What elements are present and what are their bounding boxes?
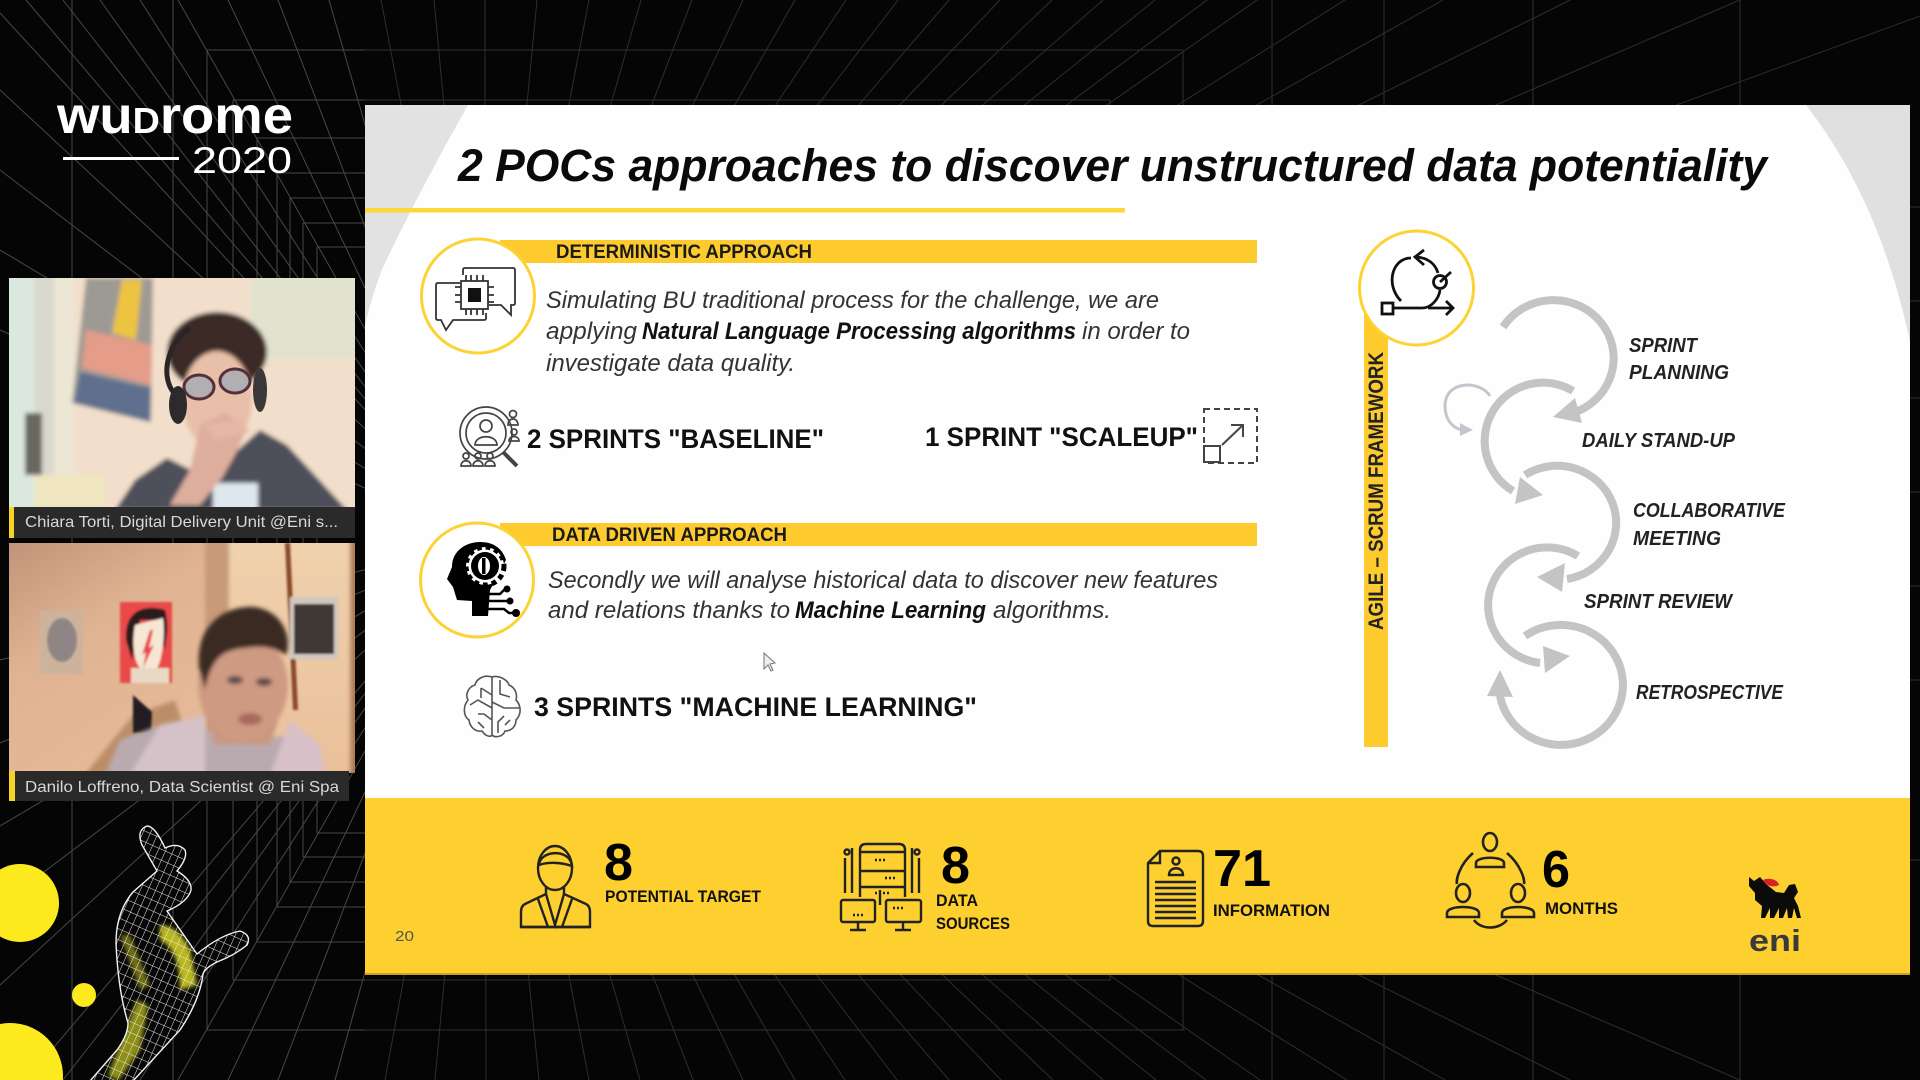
stat: 8 potential target <box>604 834 762 906</box>
stat: 8 data sources <box>936 837 1010 933</box>
video scene: woman with headphones <box>9 278 355 507</box>
vertical bar <box>1364 300 1388 747</box>
header bar <box>500 240 1257 263</box>
stat: 8 potential target: 8 <box>604 834 633 892</box>
stat: 8 potential target: POTENTIAL TARGET <box>605 887 762 906</box>
labels: scrum stages: DAILY STAND-UP <box>1582 430 1736 452</box>
slide background <box>365 105 1910 975</box>
stat: 6 months: MONTHS <box>1545 899 1618 918</box>
icon: brain <box>464 676 520 737</box>
logo: eni: eni <box>1749 923 1801 958</box>
stat: 71 information: 71 <box>1213 840 1271 898</box>
labels: scrum stages: PLANNING <box>1629 362 1729 384</box>
labels: scrum stages: SPRINT <box>1629 335 1699 357</box>
stat: 3 sprints machine learning: 3 SPRINTS "MACHINE LEARNING" <box>534 692 977 722</box>
icon: chat chip <box>422 239 534 353</box>
panel: key figures band <box>395 833 1801 958</box>
icon: team cycle <box>1447 833 1534 928</box>
caption: Danilo Loffreno: Danilo Loffreno, Data Scientist @ Eni Spa <box>25 779 339 796</box>
body text: investigate data quality. <box>546 350 795 377</box>
icon: agile loop <box>1360 231 1474 345</box>
body text: Secondly we will analyse historical data to discover new features <box>548 567 1218 594</box>
logo: wudrome 2020: wudrome <box>56 87 293 145</box>
stat: 8 data sources: SOURCES <box>936 914 1010 933</box>
vertical label: AGILE – SCRUM FRAMEWORK <box>1365 352 1388 630</box>
stat: 1 sprint scaleup: 1 SPRINT "SCALEUP" <box>925 422 1198 452</box>
body text: Simulating BU traditional process for the challenge, we are <box>546 287 1159 314</box>
icon: document profile <box>1148 851 1203 926</box>
icon: scale up <box>1204 409 1257 463</box>
labels: scrum stages: COLLABORATIVE <box>1633 500 1786 522</box>
body text: algorithms. <box>993 597 1111 624</box>
stat: 2 sprints baseline: 2 SPRINTS "BASELINE" <box>527 424 824 454</box>
stat: 6 months: 6 <box>1542 841 1570 899</box>
icon: data servers <box>841 844 921 930</box>
page number: 20 <box>395 928 414 945</box>
caption: Danilo Loffreno <box>9 771 349 801</box>
labels: scrum stages: SPRINT REVIEW <box>1584 591 1734 613</box>
title underline <box>365 208 1125 212</box>
video scene: man gesturing <box>0 535 360 780</box>
stat: 6 months <box>1542 841 1618 918</box>
body text <box>548 567 1218 624</box>
body text: and relations thanks to <box>548 597 790 624</box>
logo: eni <box>1749 877 1801 958</box>
stat: 71 information <box>1213 840 1330 920</box>
stat: 8 data sources: DATA <box>936 891 978 910</box>
icon: head with gear <box>420 523 534 637</box>
caption: Chiara Torti: Chiara Torti, Digital Delivery Unit @Eni s... <box>25 514 338 531</box>
heading: DETERMINISTIC APPROACH <box>556 241 812 263</box>
heading: DATA DRIVEN APPROACH <box>552 524 787 546</box>
panel: deterministic approach <box>422 239 1257 466</box>
logo: wudrome 2020 <box>56 87 293 181</box>
flow: scrum cycle arrows <box>1445 300 1623 745</box>
logo: wudrome 2020: 2020 <box>192 140 292 181</box>
video panel: Danilo Loffreno <box>0 535 360 801</box>
video panel: Chiara Torti <box>0 270 370 538</box>
labels: scrum stages: RETROSPECTIVE <box>1636 682 1784 704</box>
wireframe hand <box>85 820 255 1080</box>
panel: agile scrum framework <box>1360 231 1786 747</box>
labels: scrum stages: MEETING <box>1633 528 1721 550</box>
slide <box>365 105 1910 975</box>
body text <box>546 287 1190 377</box>
panel: data driven approach <box>420 523 1257 737</box>
body text: in order to <box>1082 318 1190 345</box>
labels: scrum stages <box>1582 335 1786 704</box>
icon: person <box>521 846 590 927</box>
icon: mouse cursor <box>764 653 775 671</box>
header bar <box>500 523 1257 546</box>
icon: people search <box>460 407 519 466</box>
caption: Chiara Torti <box>9 507 355 538</box>
body text: applying <box>546 318 638 345</box>
decorative yellow circles <box>0 864 96 1080</box>
stat: 71 information: INFORMATION <box>1213 901 1330 920</box>
stat: 8 data sources: 8 <box>941 837 970 895</box>
body text: Natural Language Processing algorithms <box>642 318 1076 345</box>
title: 2 POCs approaches to discover unstructured data potentiality <box>457 140 1769 191</box>
body text: Machine Learning <box>795 597 986 624</box>
